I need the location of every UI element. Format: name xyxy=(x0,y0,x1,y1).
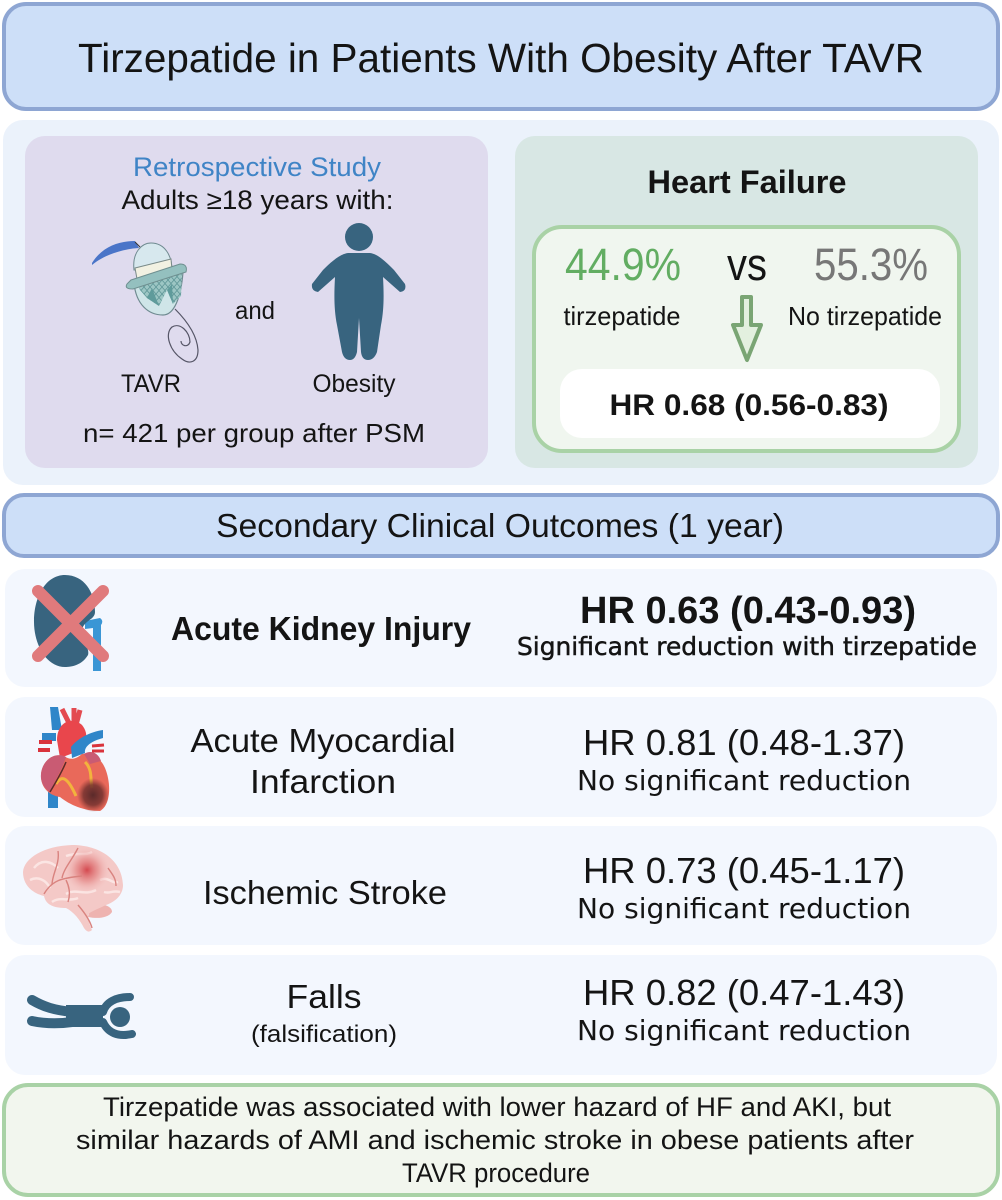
panel: heart failure xyxy=(515,136,978,468)
label: Obesity: Obesity xyxy=(312,370,396,398)
icon: kidney crossed out xyxy=(34,575,103,671)
label: no tirzepatide: No tirzepatide xyxy=(788,301,942,331)
heading: secondary clinical outcomes xyxy=(4,495,998,556)
label: TAVR: TAVR xyxy=(121,370,181,398)
hazard ratio: heart failure xyxy=(560,369,940,438)
hazard ratio: AMI: HR 0.81 (0.48-1.37) xyxy=(583,722,905,763)
text: adults: Adults ≥18 years with: xyxy=(122,185,394,215)
row: ischemic stroke xyxy=(5,826,997,945)
note: falls: No significant reduction xyxy=(577,1014,911,1047)
heading: secondary clinical outcomes: Secondary Clinical Outcomes (1 year) xyxy=(216,507,784,544)
label: acute myocardial infarction: Acute Myocardial xyxy=(190,722,456,759)
row: acute kidney injury xyxy=(5,569,997,687)
stat: no tirzepatide rate: 55.3% xyxy=(814,239,928,290)
title xyxy=(4,4,998,109)
note: stroke: No significant reduction xyxy=(577,892,911,925)
text: and: and xyxy=(235,297,275,325)
note: AKI: Significant reduction with tirzepatide xyxy=(517,632,977,661)
text: vs: vs xyxy=(727,239,767,290)
conclusion xyxy=(4,1085,998,1195)
arrow: reduction xyxy=(733,297,761,360)
conclusion: TAVR procedure xyxy=(402,1158,590,1188)
conclusion: similar hazards of AMI and ischemic stroke in obese patients after xyxy=(76,1125,914,1155)
stat: tirzepatide rate: 44.9% xyxy=(565,239,681,290)
icon: brain with stroke xyxy=(23,845,123,932)
label: falsification: (falsification) xyxy=(251,1021,397,1048)
text: sample size: n= 421 per group after PSM xyxy=(83,418,425,448)
heading: heart failure: Heart Failure xyxy=(648,164,846,200)
conclusion: Tirzepatide was associated with lower hazard of HF and AKI, but xyxy=(103,1092,892,1122)
icon: falling person xyxy=(32,997,132,1035)
row: acute myocardial infarction xyxy=(5,697,997,817)
hazard ratio: falls: HR 0.82 (0.47-1.43) xyxy=(583,972,905,1013)
hazard ratio: heart failure: HR 0.68 (0.56-0.83) xyxy=(610,389,888,422)
icon: obesity figure xyxy=(312,223,405,360)
hazard ratio: stroke: HR 0.73 (0.45-1.17) xyxy=(583,850,905,891)
heading: retrospective study: Retrospective Study xyxy=(133,152,382,182)
panel: study population xyxy=(25,136,488,468)
row: falls xyxy=(5,955,997,1075)
label: tirzepatide: tirzepatide xyxy=(564,301,680,331)
label: falls xyxy=(251,978,397,1048)
label: falls: Falls xyxy=(286,978,362,1015)
icon: TAVR valve xyxy=(92,241,198,362)
card: heart failure comparison xyxy=(534,227,959,451)
label: acute myocardial infarction xyxy=(190,722,456,800)
panel: primary study overview xyxy=(3,120,999,485)
label: acute myocardial infarction: Infarction xyxy=(250,763,396,800)
note: AMI: No significant reduction xyxy=(577,764,911,797)
title: Tirzepatide in Patients With Obesity After TAVR xyxy=(78,35,924,81)
icon: heart xyxy=(38,707,109,812)
label: ischemic stroke: Ischemic Stroke xyxy=(203,874,447,911)
hazard ratio: AKI: HR 0.63 (0.43-0.93) xyxy=(580,590,916,632)
label: acute kidney injury: Acute Kidney Injury xyxy=(171,610,472,647)
